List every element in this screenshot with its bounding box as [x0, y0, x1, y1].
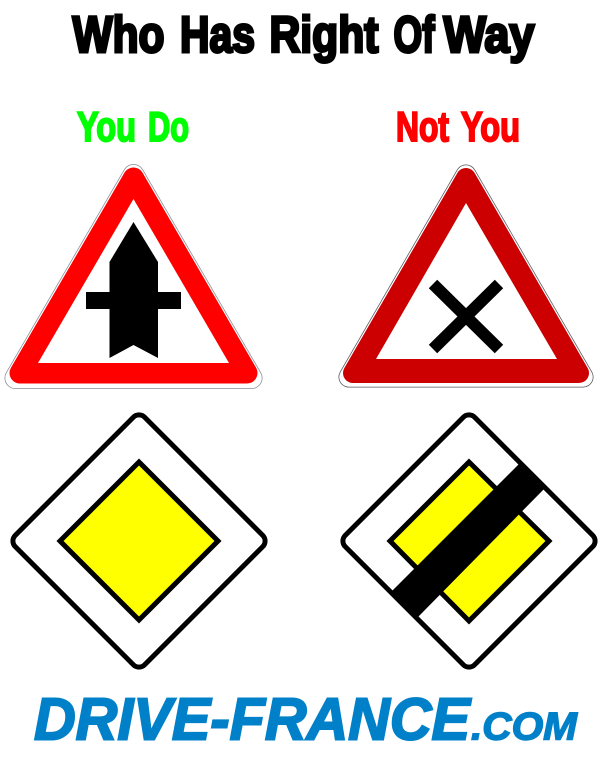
logo: drive-france.com: DRIVE-FRANCE	[34, 686, 472, 752]
sign: end of priority road diamond	[340, 412, 598, 670]
icon: priority road symbol	[86, 222, 181, 358]
title: Who	[72, 6, 164, 63]
title	[72, 6, 535, 63]
logo suffix: .COM	[471, 706, 579, 748]
sign: priority at crossroads triangle	[16, 175, 252, 378]
title: Of	[394, 6, 435, 63]
heading: you do: Do	[148, 103, 189, 150]
icon: black cross	[433, 284, 499, 349]
heading: you do	[77, 103, 189, 150]
heading: not you: You	[461, 103, 520, 150]
title: Has	[180, 6, 255, 63]
heading: not you	[396, 103, 520, 150]
heading: not you: Not	[396, 103, 449, 150]
title: Way	[444, 6, 535, 63]
sign: give way crossroads triangle	[349, 175, 583, 377]
title: Right	[270, 6, 379, 63]
sign: priority road diamond	[10, 412, 268, 670]
black diagonal bar	[392, 463, 546, 617]
heading: you do: You	[77, 103, 136, 150]
